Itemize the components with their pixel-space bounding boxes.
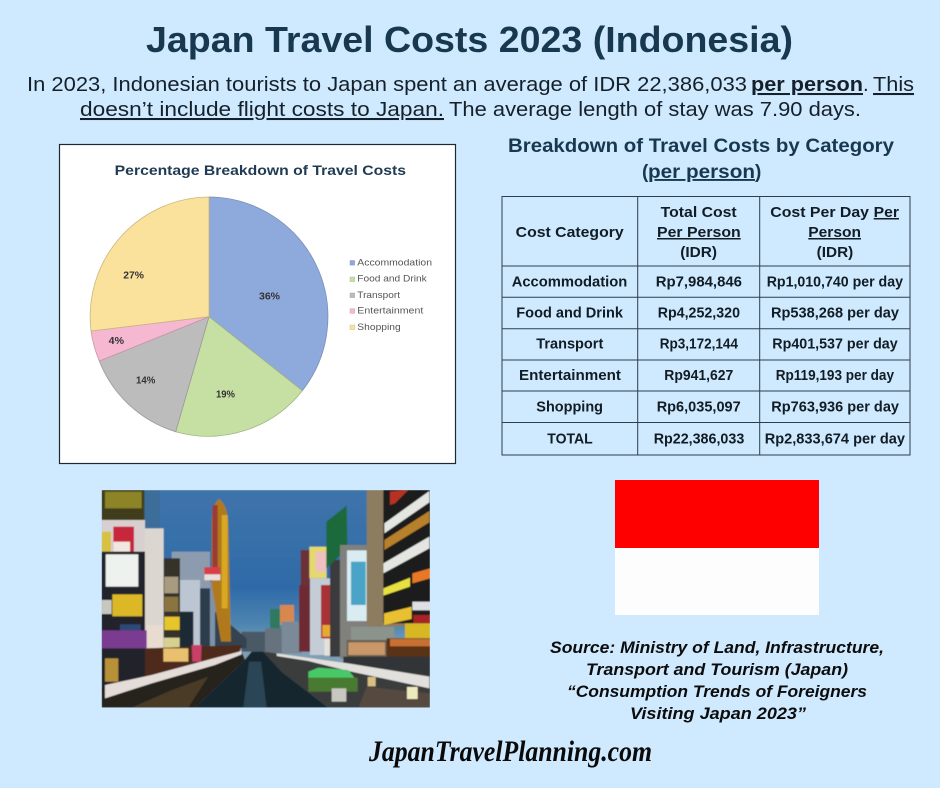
row: shopping: Shopping xyxy=(536,399,603,416)
row: accommodation xyxy=(512,274,904,291)
table heading: ) xyxy=(755,162,761,183)
panel: pie chart xyxy=(60,144,456,464)
chart legend: Food and Drink xyxy=(357,274,427,285)
row: food and drink: Food and Drink xyxy=(516,304,624,321)
row: entertainment: Rp119,193 per day xyxy=(776,367,895,384)
left bank with lanterns xyxy=(102,652,245,708)
right bank with lanterns xyxy=(263,652,430,708)
photo: Dotonbori canal at dusk xyxy=(102,490,430,708)
street glow left xyxy=(144,644,242,677)
chart legend: Accommodation xyxy=(357,257,432,268)
table header row: (IDR) xyxy=(817,244,853,261)
row: total xyxy=(547,430,906,447)
table header row xyxy=(516,204,899,261)
row: transport: Transport xyxy=(536,335,603,352)
table header row: Total Cost xyxy=(661,204,737,221)
row: shopping xyxy=(536,399,900,416)
intro text block: per person xyxy=(751,73,863,96)
row: accommodation: Rp1,010,740 per day xyxy=(767,274,904,291)
row: food and drink: Rp538,268 per day xyxy=(771,304,900,321)
canal water xyxy=(195,652,328,708)
table heading xyxy=(508,136,894,183)
row: total: TOTAL xyxy=(547,430,593,447)
table header row: Cost Per Day xyxy=(770,204,870,221)
table header row: Per xyxy=(874,204,899,221)
row: shopping: Rp763,936 per day xyxy=(771,399,900,416)
row: total: Rp2,833,674 per day xyxy=(765,430,906,447)
table heading: Breakdown of Travel Costs by Category xyxy=(508,136,894,157)
row: transport xyxy=(536,335,898,352)
left buildings xyxy=(171,551,211,590)
source note: Transport and Tourism (Japan) xyxy=(586,661,849,679)
distant right buildings xyxy=(270,609,280,629)
row: accommodation: Rp7,984,846 xyxy=(656,274,742,291)
row: accommodation: Accommodation xyxy=(512,274,627,291)
neon tower xyxy=(212,499,231,642)
table header row: (IDR) xyxy=(680,244,717,261)
source note: Source: Ministry of Land, Infrastructure, xyxy=(550,639,884,657)
pie value labels: 4% xyxy=(109,335,125,347)
intro text block: doesn’t include flight costs to Japan. xyxy=(80,98,444,121)
row: food and drink: Rp4,252,320 xyxy=(658,304,740,321)
pie value labels: 14% xyxy=(136,374,156,386)
right tall building xyxy=(367,490,430,627)
row: entertainment: Entertainment xyxy=(519,367,621,384)
intro text block xyxy=(27,73,914,121)
source note xyxy=(550,639,884,723)
cost table xyxy=(502,196,910,455)
pie value labels: 36% xyxy=(259,290,281,302)
source note: Visiting Japan 2023” xyxy=(630,705,807,723)
pie value labels xyxy=(109,269,281,400)
row: transport: Rp401,537 per day xyxy=(772,335,898,352)
intro text block: In 2023, Indonesian tourists to Japan spent an average of IDR 22,386,033 xyxy=(27,73,747,96)
Indonesian flag xyxy=(615,480,819,615)
row: transport: Rp3,172,144 xyxy=(660,335,739,352)
chart legend: Transport xyxy=(357,290,400,301)
table heading: ( xyxy=(642,162,649,183)
chart legend xyxy=(350,257,432,333)
row: entertainment: Rp941,627 xyxy=(664,367,733,384)
pie slices xyxy=(90,197,328,436)
table header row: Person xyxy=(808,224,861,241)
intro text block: . xyxy=(863,73,869,96)
chart title: Percentage Breakdown of Travel Costs xyxy=(115,162,406,178)
table header row: Per Person xyxy=(657,224,741,241)
row: shopping: Rp6,035,097 xyxy=(657,399,741,416)
row: total: Rp22,386,033 xyxy=(654,430,744,447)
row: entertainment xyxy=(519,367,895,384)
source note: “Consumption Trends of Foreigners xyxy=(567,683,867,701)
pie value labels: 27% xyxy=(123,269,145,281)
table grid xyxy=(502,196,910,455)
pie value labels: 19% xyxy=(216,388,236,400)
chart legend: Entertainment xyxy=(357,305,424,316)
footer website name: JapanTravelPlanning.com xyxy=(368,735,652,768)
table heading: per person xyxy=(648,162,755,183)
row: food and drink xyxy=(516,304,900,321)
intro text block: This xyxy=(873,73,914,96)
intro text block: The average length of stay was 7.90 days. xyxy=(449,98,861,121)
title: Japan Travel Costs 2023 (Indonesia) xyxy=(146,19,793,60)
chart legend: Shopping xyxy=(357,322,401,333)
table header row: Cost Category xyxy=(516,224,624,241)
green boat xyxy=(308,666,355,678)
